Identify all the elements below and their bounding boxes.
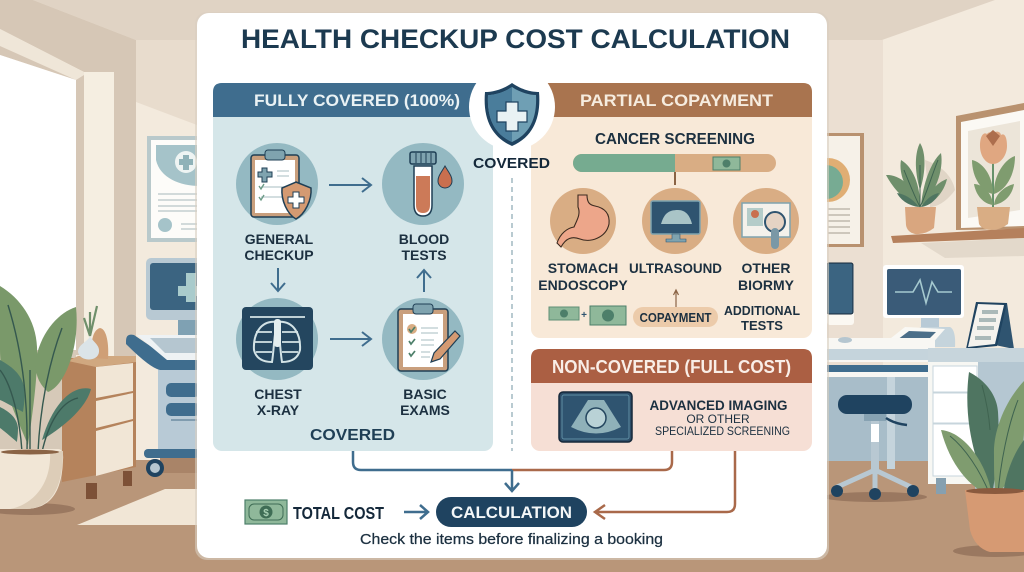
infographic card xyxy=(195,12,829,560)
cabinet with drawers xyxy=(62,306,136,499)
icon: advanced imaging scan xyxy=(559,392,632,442)
text: advanced imaging: SPECIALIZED SCREENING xyxy=(655,426,790,438)
label: general checkup: GENERAL xyxy=(245,231,314,247)
footer note: Check the items before finalizing a booking xyxy=(360,531,663,548)
bar: coverage split xyxy=(573,154,776,185)
connector: non-covered to center xyxy=(512,451,672,470)
connector: non-covered right branch xyxy=(595,451,735,519)
divider: dashed xyxy=(511,178,513,451)
plant: left xyxy=(0,286,91,515)
label: other biormy: OTHER xyxy=(742,260,790,276)
label: covered: COVERED xyxy=(310,427,395,444)
monitor and ultrasound cart xyxy=(126,258,206,477)
plant: right xyxy=(941,372,1024,557)
label: cancer screening: CANCER SCREENING xyxy=(595,131,755,148)
label: blood tests: TESTS xyxy=(401,247,447,263)
heading: non-covered: NON-COVERED (FULL COST) xyxy=(552,357,791,377)
label: ultrasound: ULTRASOUND xyxy=(629,260,722,276)
icon: basic exams clipboard xyxy=(382,298,464,380)
arrow: copayment pointer xyxy=(674,290,678,310)
desk with monitor and stool xyxy=(823,263,1024,502)
heading: partial copayment: PARTIAL COPAYMENT xyxy=(580,91,774,110)
label: basic exams: EXAMS xyxy=(400,402,450,418)
label: general checkup: CHECKUP xyxy=(244,247,314,263)
text: advanced imaging: ADVANCED IMAGING xyxy=(650,397,788,413)
label: stomach endoscopy: STOMACH xyxy=(548,260,618,276)
arrow: down xyxy=(271,268,285,291)
arrow: into calculation xyxy=(505,470,519,491)
panel: non-covered xyxy=(531,349,812,451)
arrow: to calculation xyxy=(404,505,428,519)
label: other biormy: BIORMY xyxy=(738,277,795,293)
arrow: up xyxy=(417,270,431,292)
icon: money: $ xyxy=(263,508,269,519)
icon: chest x-ray xyxy=(236,298,318,380)
emblem: covered shield xyxy=(469,64,555,172)
label: basic exams: BASIC xyxy=(403,386,447,402)
pill: calculation: CALCULATION xyxy=(451,504,572,522)
wall shelf with plant and framed picture xyxy=(886,103,1024,258)
poster: left wall medical xyxy=(147,136,202,242)
emblem: covered shield: COVERED xyxy=(473,155,550,172)
arrow xyxy=(329,178,371,192)
connector: covered to calculation xyxy=(353,451,512,470)
panel: fully covered xyxy=(213,83,493,451)
icon: money xyxy=(245,500,287,524)
icon: biopsy magnifier xyxy=(733,188,799,254)
heading: fully covered: FULLY COVERED (100%) xyxy=(254,91,460,110)
label: blood tests: BLOOD xyxy=(399,231,449,247)
label: chest x-ray: X-RAY xyxy=(257,402,300,418)
label: additional tests: TESTS xyxy=(741,318,783,333)
icon: general checkup clipboard xyxy=(236,143,318,225)
label: total cost: TOTAL COST xyxy=(293,503,384,523)
label: additional tests: ADDITIONAL xyxy=(724,303,800,318)
poster: right wall xyxy=(806,133,864,247)
title: HEALTH CHECKUP COST CALCULATION xyxy=(241,24,790,54)
icon: money plus money xyxy=(549,306,626,325)
icon: stomach xyxy=(550,188,616,254)
icon: money plus money: + xyxy=(581,310,587,321)
label: chest x-ray: CHEST xyxy=(254,386,302,402)
icon: blood test tube xyxy=(382,143,464,225)
icon: ultrasound monitor xyxy=(642,188,708,254)
pill: copayment xyxy=(633,307,718,327)
pill: copayment: COPAYMENT xyxy=(640,311,712,325)
panel: partial copayment xyxy=(531,83,812,338)
pill: calculation xyxy=(436,497,587,527)
text: advanced imaging: OR OTHER xyxy=(686,412,750,426)
arrow xyxy=(330,332,371,346)
label: stomach endoscopy: ENDOSCOPY xyxy=(538,277,628,293)
